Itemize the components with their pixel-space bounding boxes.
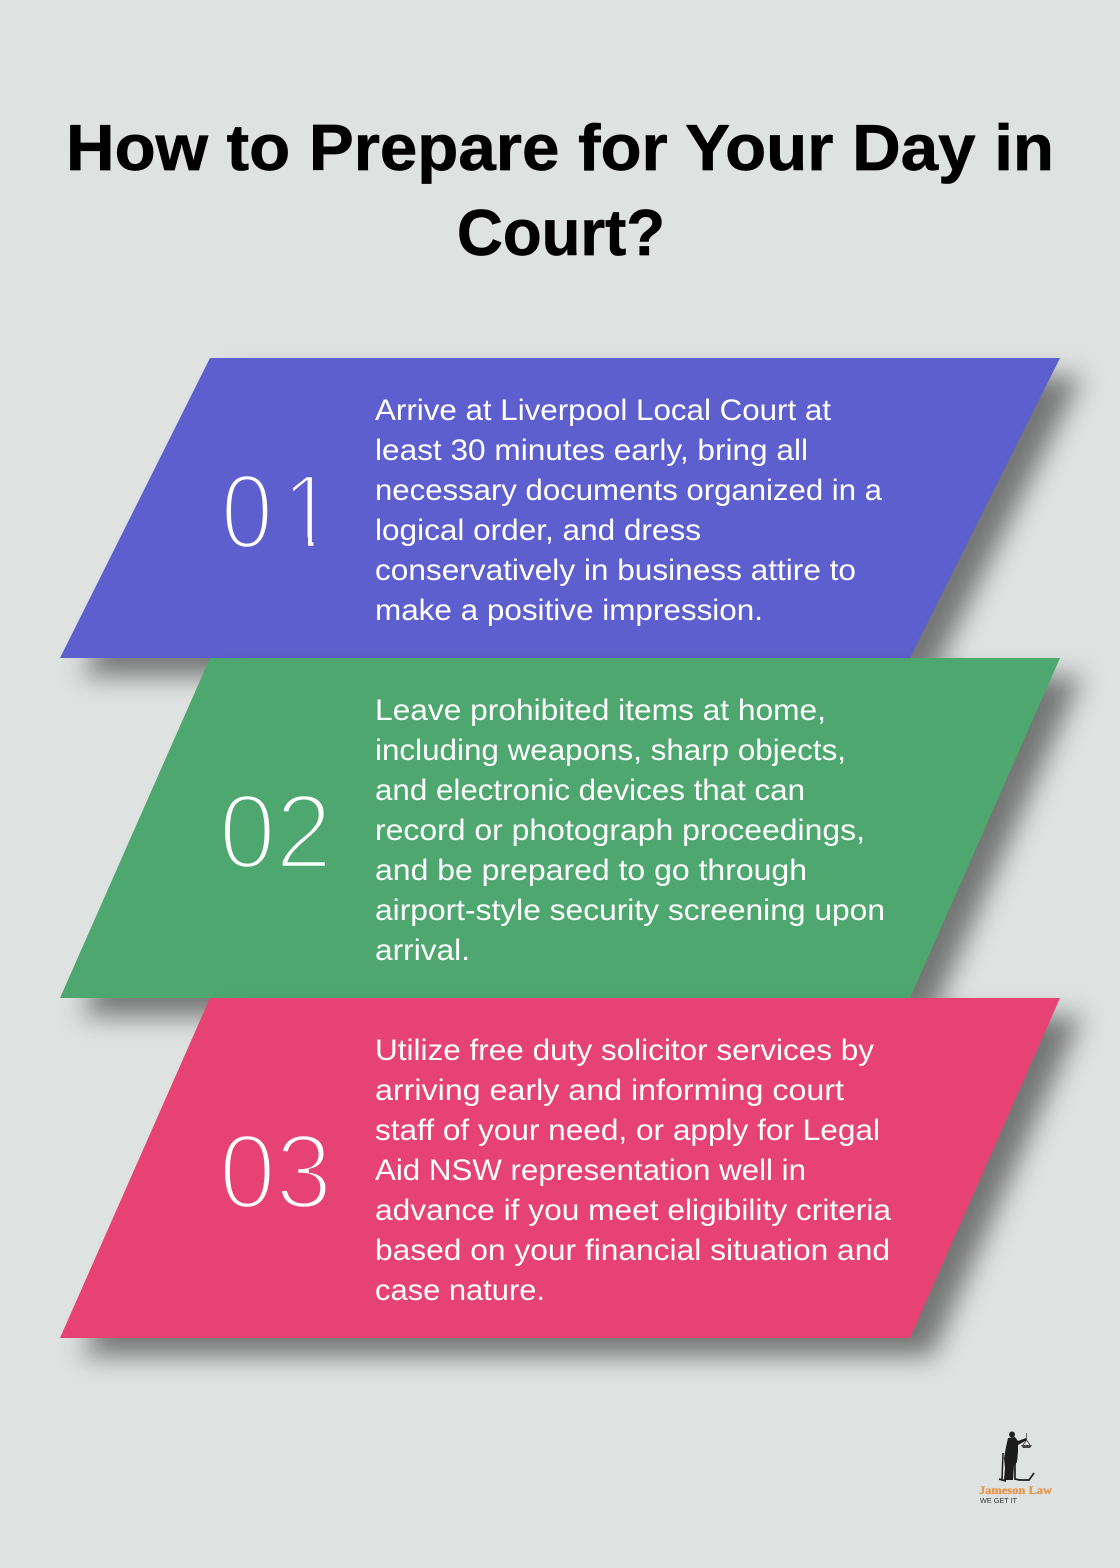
text: step 01: [375, 394, 882, 627]
text: step 03: case nature.: [375, 1274, 545, 1307]
logo name: Jameson Law: [979, 1485, 1053, 1497]
panel: step 02: [60, 658, 1082, 1016]
text: step 02: [375, 694, 885, 967]
text: step 03: [375, 1034, 891, 1307]
text: step 01: make a positive impression.: [375, 594, 763, 627]
text: step 03: based on your financial situation and: [375, 1234, 890, 1267]
number 03: 03: [219, 1113, 332, 1231]
number 01: 1: [282, 454, 334, 571]
logo tagline: WE GET IT: [980, 1496, 1017, 1505]
text: step 03: staff of your need, or apply for Legal: [375, 1114, 880, 1147]
title: Court?: [457, 196, 665, 269]
title: [66, 111, 1054, 269]
text: step 02: arrival.: [375, 934, 470, 967]
text: step 01: necessary documents organized in a: [375, 474, 882, 507]
icon: lady justice: [999, 1432, 1034, 1481]
text: step 03: advance if you meet eligibility criteria: [375, 1194, 891, 1227]
text: step 02: and be prepared to go through: [375, 854, 807, 887]
text: step 01: logical order, and dress: [375, 514, 701, 547]
text: step 01: conservatively in business attire to: [375, 554, 856, 587]
number 02: 02: [219, 773, 332, 891]
text: step 02: record or photograph proceedings,: [375, 814, 865, 847]
number 01: 0: [221, 454, 273, 571]
text: step 03: arriving early and informing court: [375, 1074, 845, 1107]
text: step 02: Leave prohibited items at home,: [375, 694, 826, 727]
logo: Jameson Law: [979, 1432, 1053, 1505]
text: step 01: least 30 minutes early, bring all: [375, 434, 808, 467]
text: step 02: including weapons, sharp objects,: [375, 734, 846, 767]
text: step 03: Aid NSW representation well in: [375, 1154, 806, 1187]
text: step 02: and electronic devices that can: [375, 774, 805, 807]
number 01: [221, 454, 334, 571]
panel: step 01: [60, 358, 1082, 676]
panel: step 03: [60, 998, 1082, 1356]
text: step 02: airport-style security screening upon: [375, 894, 885, 927]
title: How to Prepare for Your Day in: [66, 111, 1054, 184]
text: step 03: Utilize free duty solicitor services by: [375, 1034, 874, 1067]
text: step 01: Arrive at Liverpool Local Court at: [375, 394, 832, 427]
